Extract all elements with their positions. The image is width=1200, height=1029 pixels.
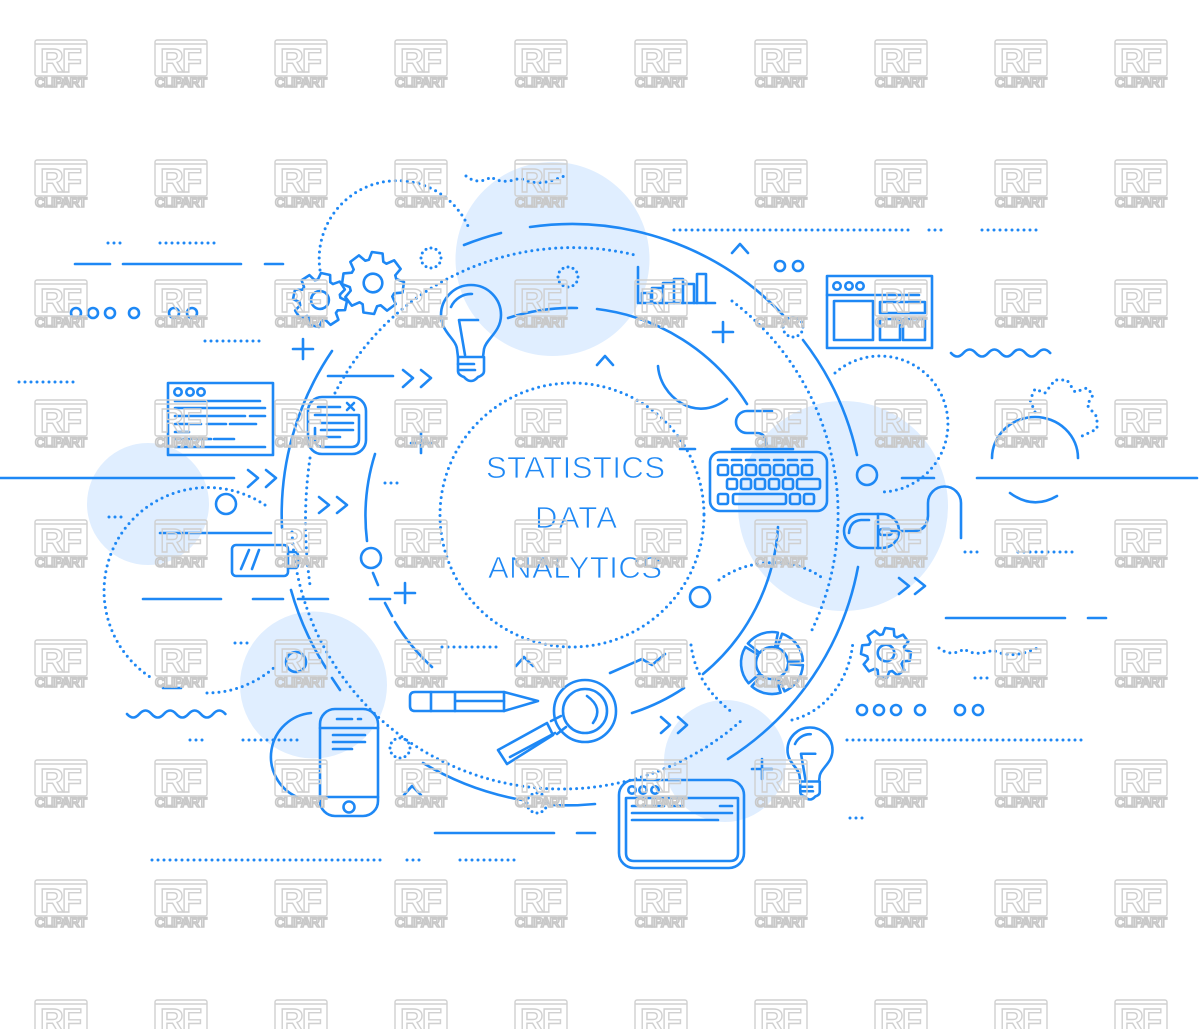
watermark grid: RF — [640, 162, 682, 199]
watermark grid: RF — [640, 642, 682, 679]
small dotted circles — [390, 248, 803, 813]
watermark grid: RF — [1000, 762, 1042, 799]
watermark grid: CLIPART — [155, 914, 207, 930]
watermark grid: RF — [1000, 642, 1042, 679]
watermark grid: RF — [880, 762, 922, 799]
watermark grid: RF — [520, 522, 562, 559]
watermark grid: RF — [160, 882, 202, 919]
watermark grid: RF — [40, 162, 82, 199]
watermark grid: CLIPART — [875, 554, 927, 570]
watermark grid: RF — [760, 642, 802, 679]
watermark grid: RF — [1000, 42, 1042, 79]
watermark grid: RF — [760, 162, 802, 199]
icon: magnifying glass — [498, 680, 616, 764]
watermark grid: RF — [40, 522, 82, 559]
inner solid ring — [365, 308, 778, 713]
watermark grid: RF — [880, 282, 922, 319]
watermark grid: CLIPART — [1115, 794, 1167, 810]
watermark grid: RF — [40, 282, 82, 319]
watermark grid: CLIPART — [755, 74, 807, 90]
watermark grid: CLIPART — [995, 314, 1047, 330]
icon: browser window right — [827, 276, 932, 348]
watermark grid: RF — [880, 522, 922, 559]
watermark grid: CLIPART — [755, 434, 807, 450]
watermark grid: RF — [760, 282, 802, 319]
circle rows — [71, 261, 983, 715]
watermark grid: RF — [160, 282, 202, 319]
watermark grid: RF — [280, 882, 322, 919]
watermark grid: RF — [160, 642, 202, 679]
watermark grid: RF — [1120, 642, 1162, 679]
watermark grid: CLIPART — [995, 434, 1047, 450]
title text: statistics data analytics: DATA — [535, 500, 617, 535]
watermark grid: RF — [400, 162, 442, 199]
watermark grid: CLIPART — [875, 674, 927, 690]
watermark grid: CLIPART — [35, 74, 87, 90]
watermark grid: CLIPART — [755, 674, 807, 690]
watermark grid: RF — [520, 762, 562, 799]
watermark grid: CLIPART — [635, 794, 687, 810]
icon: dome with dotted cloud — [992, 380, 1097, 502]
watermark grid: CLIPART — [635, 314, 687, 330]
icon: gear large left — [339, 249, 407, 317]
chevron pairs — [248, 370, 925, 733]
watermark grid: CLIPART — [635, 914, 687, 930]
watermark grid: CLIPART — [755, 194, 807, 210]
watermark grid: CLIPART — [155, 434, 207, 450]
watermark grid: CLIPART — [275, 914, 327, 930]
watermark grid: CLIPART — [875, 314, 927, 330]
watermark grid: RF — [880, 882, 922, 919]
watermark grid: RF — [160, 762, 202, 799]
watermark grid: RF — [520, 642, 562, 679]
watermark grid: CLIPART — [35, 314, 87, 330]
watermark grid: CLIPART — [995, 74, 1047, 90]
watermark grid: CLIPART — [395, 674, 447, 690]
watermark grid: CLIPART — [275, 74, 327, 90]
watermark grid: CLIPART — [635, 194, 687, 210]
watermark grid: RF — [760, 762, 802, 799]
watermark grid: CLIPART — [395, 914, 447, 930]
watermark grid: RF — [400, 882, 442, 919]
watermark grid: CLIPART — [35, 434, 87, 450]
watermark grid: CLIPART — [1115, 74, 1167, 90]
watermark grid: RF — [1000, 162, 1042, 199]
icon: browser window left — [168, 383, 273, 455]
wavy lines — [127, 176, 1050, 718]
horizontal accent lines — [0, 264, 1197, 833]
watermark grid: RF — [640, 402, 682, 439]
carets — [404, 244, 748, 795]
dotted accent lines — [19, 230, 1082, 860]
watermark grid: RF — [880, 162, 922, 199]
watermark grid: RF — [40, 882, 82, 919]
watermark grid: CLIPART — [515, 194, 567, 210]
watermark grid: CLIPART — [635, 434, 687, 450]
watermark grid: RF — [640, 882, 682, 919]
watermark grid: RF — [280, 402, 322, 439]
watermark grid: RF — [280, 762, 322, 799]
watermark grid: RF — [280, 642, 322, 679]
watermark grid: RF — [640, 522, 682, 559]
watermark grid: RF — [1120, 162, 1162, 199]
watermark grid: CLIPART — [155, 554, 207, 570]
watermark grid: CLIPART — [635, 674, 687, 690]
watermark grid: RF — [520, 162, 562, 199]
main line art — [0, 176, 1197, 868]
watermark grid: CLIPART — [395, 554, 447, 570]
watermark grid: RF — [1000, 282, 1042, 319]
watermark grid: CLIPART — [995, 674, 1047, 690]
watermark grid: CLIPART — [395, 194, 447, 210]
watermark grid: CLIPART — [515, 794, 567, 810]
watermark grid: CLIPART — [515, 674, 567, 690]
watermark grid: RF — [280, 282, 322, 319]
icon: keyboard with cable — [710, 411, 827, 511]
watermark grid: CLIPART — [755, 914, 807, 930]
watermark grid: CLIPART — [635, 554, 687, 570]
watermark grid: RF — [1000, 522, 1042, 559]
watermark grid: CLIPART — [515, 434, 567, 450]
watermark grid: CLIPART — [515, 314, 567, 330]
watermark grid: RF — [760, 522, 802, 559]
dotted middle ring — [292, 248, 838, 789]
watermark grid: CLIPART — [395, 794, 447, 810]
watermark grid: CLIPART — [995, 794, 1047, 810]
watermark grid: CLIPART — [275, 194, 327, 210]
watermark grid: RF — [1120, 42, 1162, 79]
icon: segmented donut chart — [741, 632, 803, 694]
watermark grid: CLIPART — [875, 914, 927, 930]
watermark grid: RF — [1120, 882, 1162, 919]
watermark grid: CLIPART — [1115, 554, 1167, 570]
watermark grid: RF — [1120, 522, 1162, 559]
watermark grid: CLIPART — [395, 434, 447, 450]
title text: statistics data analytics: STATISTICS — [486, 450, 665, 485]
watermark grid: CLIPART — [35, 794, 87, 810]
watermark grid: CLIPART — [515, 554, 567, 570]
watermark grid: CLIPART — [1115, 314, 1167, 330]
watermark grid: RF — [160, 162, 202, 199]
watermark grid: RF — [760, 402, 802, 439]
outer solid ring — [282, 224, 858, 805]
watermark grid: RF — [520, 402, 562, 439]
central dotted circle — [440, 383, 704, 647]
icon: gear right — [858, 625, 914, 681]
watermark grid: CLIPART — [755, 554, 807, 570]
watermark grid: CLIPART — [1115, 434, 1167, 450]
watermark grid: CLIPART — [995, 914, 1047, 930]
icon: battery — [232, 545, 298, 576]
icon: small rounded window — [308, 397, 366, 454]
watermark grid: RF — [400, 642, 442, 679]
watermark grid: CLIPART — [875, 194, 927, 210]
watermark grid: CLIPART — [995, 554, 1047, 570]
watermark grid: RF — [40, 402, 82, 439]
watermark grid: CLIPART — [1115, 194, 1167, 210]
watermark grid: RF — [640, 42, 682, 79]
watermark grid: CLIPART — [1115, 674, 1167, 690]
watermark grid: CLIPART — [275, 674, 327, 690]
watermark grid: CLIPART — [155, 74, 207, 90]
watermark grid: CLIPART — [515, 74, 567, 90]
watermark grid: RF — [520, 882, 562, 919]
watermark grid: RF — [160, 522, 202, 559]
dotted arcs — [104, 181, 948, 720]
watermark grid: RF — [520, 42, 562, 79]
watermark grid: CLIPART — [995, 194, 1047, 210]
watermark grid: RF — [40, 642, 82, 679]
watermark grid: RF — [40, 42, 82, 79]
watermark grid: CLIPART — [275, 434, 327, 450]
watermark grid: CLIPART — [1115, 914, 1167, 930]
watermark grid: RF — [880, 42, 922, 79]
watermark grid: RF — [640, 762, 682, 799]
watermark grid: CLIPART — [35, 674, 87, 690]
title text: statistics data analytics — [486, 450, 665, 585]
watermark grid: RF — [880, 402, 922, 439]
watermark grid: RF — [1120, 402, 1162, 439]
watermark grid: RF — [760, 42, 802, 79]
icon: large bottom browser window — [619, 780, 744, 868]
icon: computer mouse with cable — [844, 487, 961, 548]
watermark grid: CLIPART — [395, 74, 447, 90]
watermark grid: CLIPART — [275, 794, 327, 810]
watermark grid: RF — [280, 162, 322, 199]
watermark grid: CLIPART — [35, 194, 87, 210]
watermark grid: RF — [1000, 882, 1042, 919]
icon: smartphone — [271, 709, 378, 816]
watermark grid: RF — [400, 42, 442, 79]
watermark grid: RF — [280, 42, 322, 79]
small open circles — [216, 465, 877, 672]
icon: pencil — [410, 692, 538, 711]
watermark grid: RF — [1120, 762, 1162, 799]
watermark grid: RF — [520, 282, 562, 319]
watermark grid: RF — [160, 42, 202, 79]
watermark grid: RF — [400, 522, 442, 559]
watermark grid: RF — [400, 762, 442, 799]
watermark grid: RF — [400, 282, 442, 319]
watermark grid: RF — [280, 522, 322, 559]
watermark grid: CLIPART — [35, 914, 87, 930]
watermark grid: RF — [400, 402, 442, 439]
watermark grid: RF — [1120, 282, 1162, 319]
watermark grid: RF — [760, 882, 802, 919]
watermark grid: CLIPART — [755, 314, 807, 330]
watermark grid: CLIPART — [275, 314, 327, 330]
watermark grid: CLIPART — [155, 194, 207, 210]
watermark grid: CLIPART — [395, 314, 447, 330]
watermark grid: CLIPART — [155, 674, 207, 690]
icon: line chart — [610, 654, 665, 673]
watermark grid: RF — [880, 642, 922, 679]
title text: statistics data analytics: ANALYTICS — [488, 550, 662, 585]
icon: small light bulb — [788, 728, 832, 800]
watermark grid: CLIPART — [155, 794, 207, 810]
watermark grid: RF — [640, 282, 682, 319]
watermark grid: CLIPART — [755, 794, 807, 810]
watermark grid: CLIPART — [35, 554, 87, 570]
watermark grid: RF — [160, 402, 202, 439]
watermark grid: CLIPART — [515, 914, 567, 930]
plus signs — [293, 322, 772, 779]
pale blue accent circles — [87, 162, 948, 822]
watermark grid: CLIPART — [155, 314, 207, 330]
watermark grid: CLIPART — [635, 74, 687, 90]
icon: bar chart — [638, 267, 715, 303]
watermark grid: RF — [40, 762, 82, 799]
watermark grid: CLIPART — [875, 794, 927, 810]
icon: large light bulb — [441, 285, 501, 381]
watermark grid: CLIPART — [275, 554, 327, 570]
icon: gear small left — [288, 268, 352, 332]
watermark grid: RF — [1000, 402, 1042, 439]
watermark grid: CLIPART — [875, 434, 927, 450]
watermark grid: CLIPART — [875, 74, 927, 90]
